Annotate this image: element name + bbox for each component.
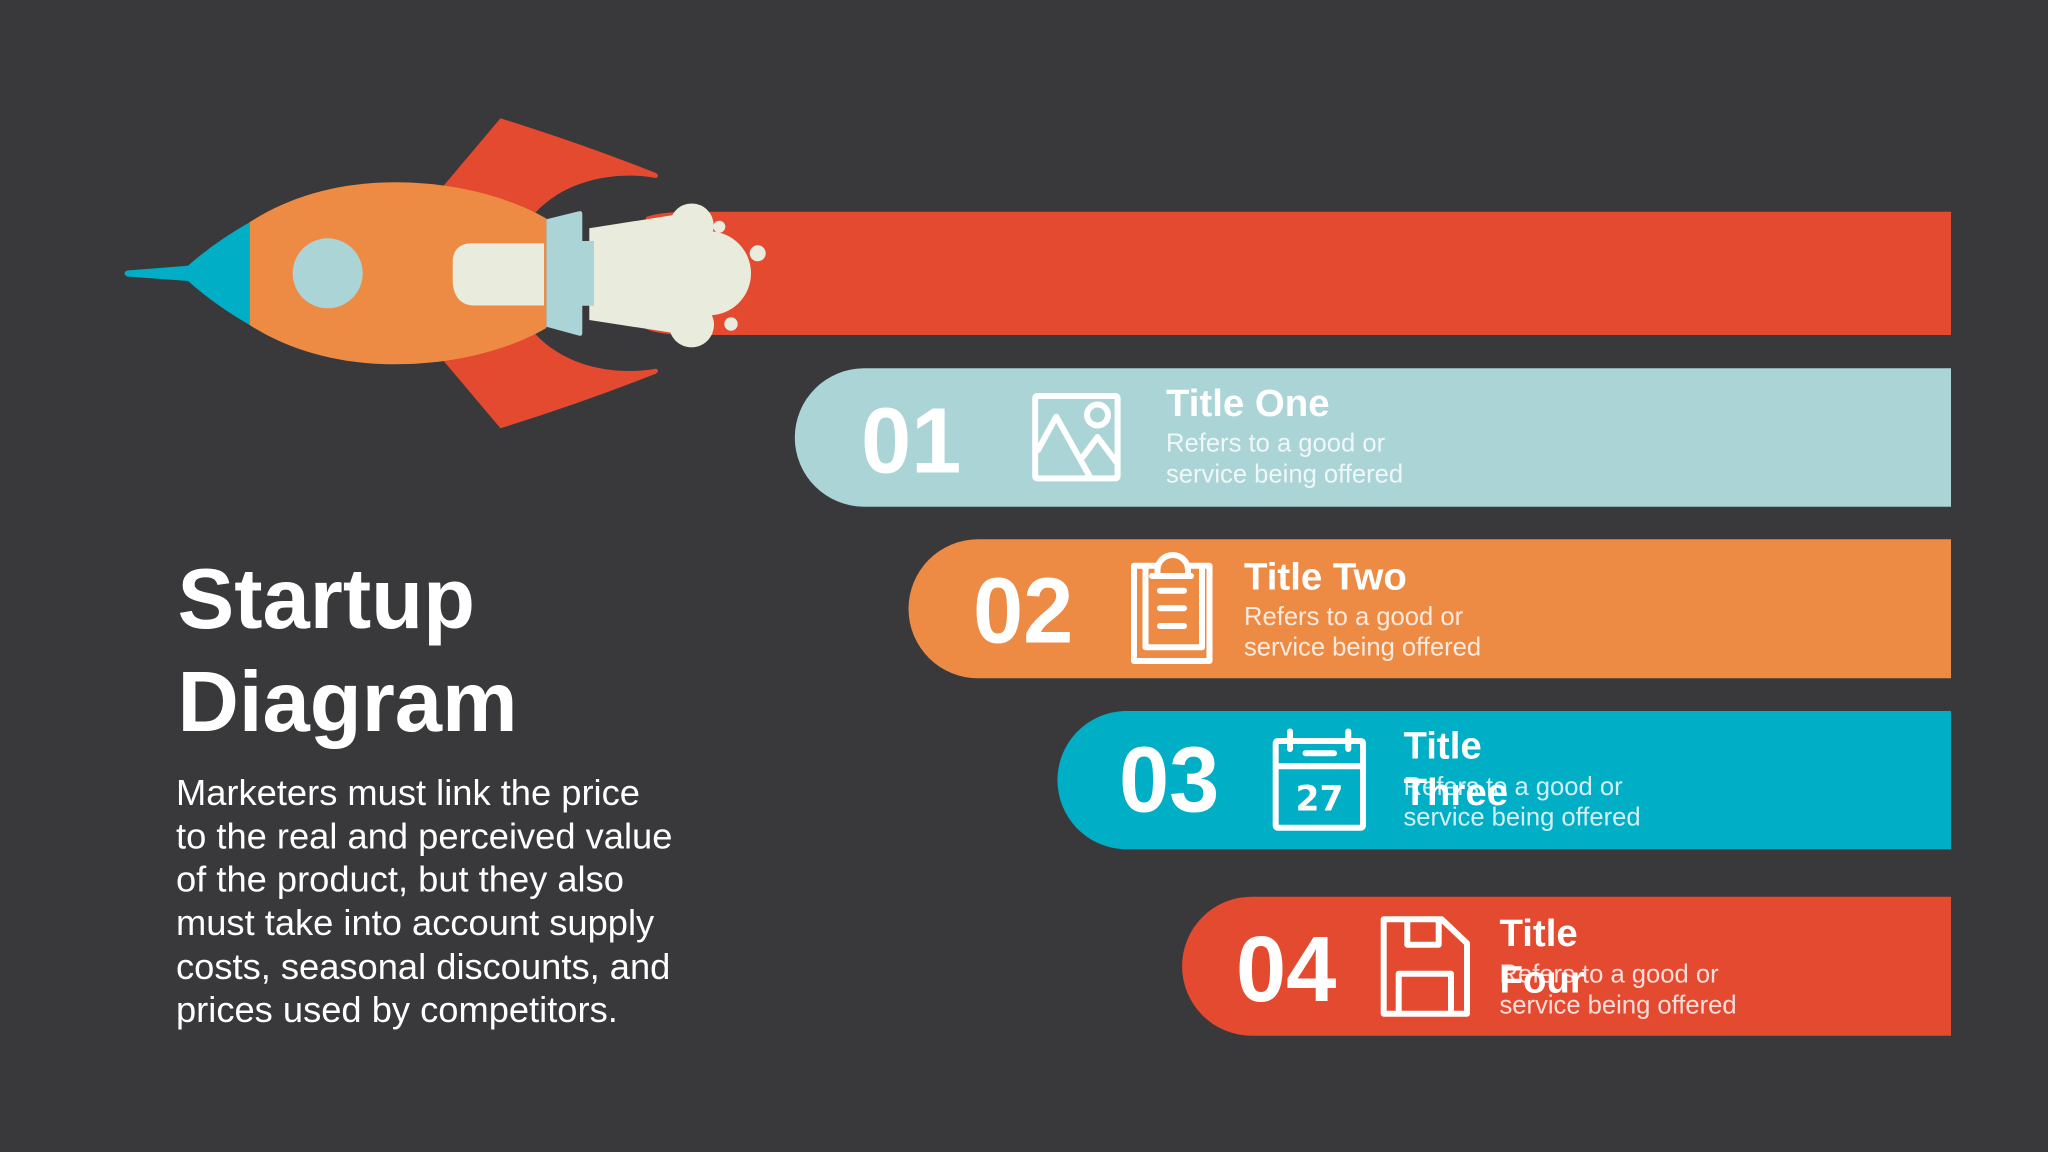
band 01 bbox=[795, 368, 1951, 507]
body text: must take into account supply bbox=[176, 902, 655, 943]
title four: Title bbox=[1500, 912, 1578, 955]
title one: Title One bbox=[1166, 382, 1330, 425]
icon: floppy disk bbox=[1384, 919, 1467, 1014]
icon: calendar: 27 bbox=[1295, 780, 1344, 820]
title three: Three bbox=[1404, 771, 1508, 814]
description two: Refers to a good or bbox=[1244, 603, 1463, 631]
description four: service being offered bbox=[1500, 991, 1737, 1019]
title two: Title Two bbox=[1244, 555, 1407, 598]
rocket nose cone bbox=[124, 222, 250, 325]
description two: service being offered bbox=[1244, 634, 1481, 662]
rocket exhaust trail bar bbox=[646, 212, 1951, 335]
number 02: 02 bbox=[973, 559, 1073, 663]
description four: Refers to a good or bbox=[1500, 961, 1719, 989]
description three: Refers to a good or bbox=[1404, 773, 1623, 801]
panel: item 01 bbox=[795, 368, 1951, 507]
number 04: 04 bbox=[1236, 918, 1336, 1021]
band 04 bbox=[1182, 897, 1951, 1036]
icon: picture bbox=[1035, 396, 1118, 478]
description three: service being offered bbox=[1404, 804, 1641, 832]
rocket bottom fin bbox=[440, 306, 658, 428]
panel: item 03 bbox=[1057, 711, 1951, 849]
description one: service being offered bbox=[1166, 460, 1403, 488]
number 03: 03 bbox=[1119, 728, 1219, 832]
rocket hatch bbox=[453, 243, 544, 306]
heading: Diagram bbox=[178, 655, 518, 750]
title three: Title bbox=[1404, 724, 1482, 767]
band 02 bbox=[908, 539, 1951, 678]
body text: prices used by competitors. bbox=[176, 989, 618, 1030]
icon: clipboard bbox=[1134, 555, 1210, 661]
number 01: 01 bbox=[861, 389, 961, 493]
rocket illustration bbox=[124, 118, 766, 428]
title four: Four bbox=[1500, 959, 1585, 1002]
description one: Refers to a good or bbox=[1166, 430, 1385, 458]
body text: of the product, but they also bbox=[176, 859, 624, 900]
band 03 bbox=[1057, 711, 1951, 849]
rocket flame cloud bbox=[589, 204, 766, 347]
panel: item 02 bbox=[908, 539, 1951, 678]
body text: Marketers must link the price bbox=[176, 772, 640, 813]
body text: costs, seasonal discounts, and bbox=[176, 946, 670, 987]
panel: item 04 bbox=[1182, 897, 1951, 1036]
rocket nozzle bbox=[546, 211, 594, 336]
rocket window bbox=[293, 238, 363, 308]
heading: Startup bbox=[178, 552, 475, 647]
rocket body bbox=[250, 182, 546, 364]
icon: calendar bbox=[1276, 732, 1363, 828]
body text: to the real and perceived value bbox=[176, 815, 672, 856]
rocket top fin bbox=[440, 118, 658, 240]
